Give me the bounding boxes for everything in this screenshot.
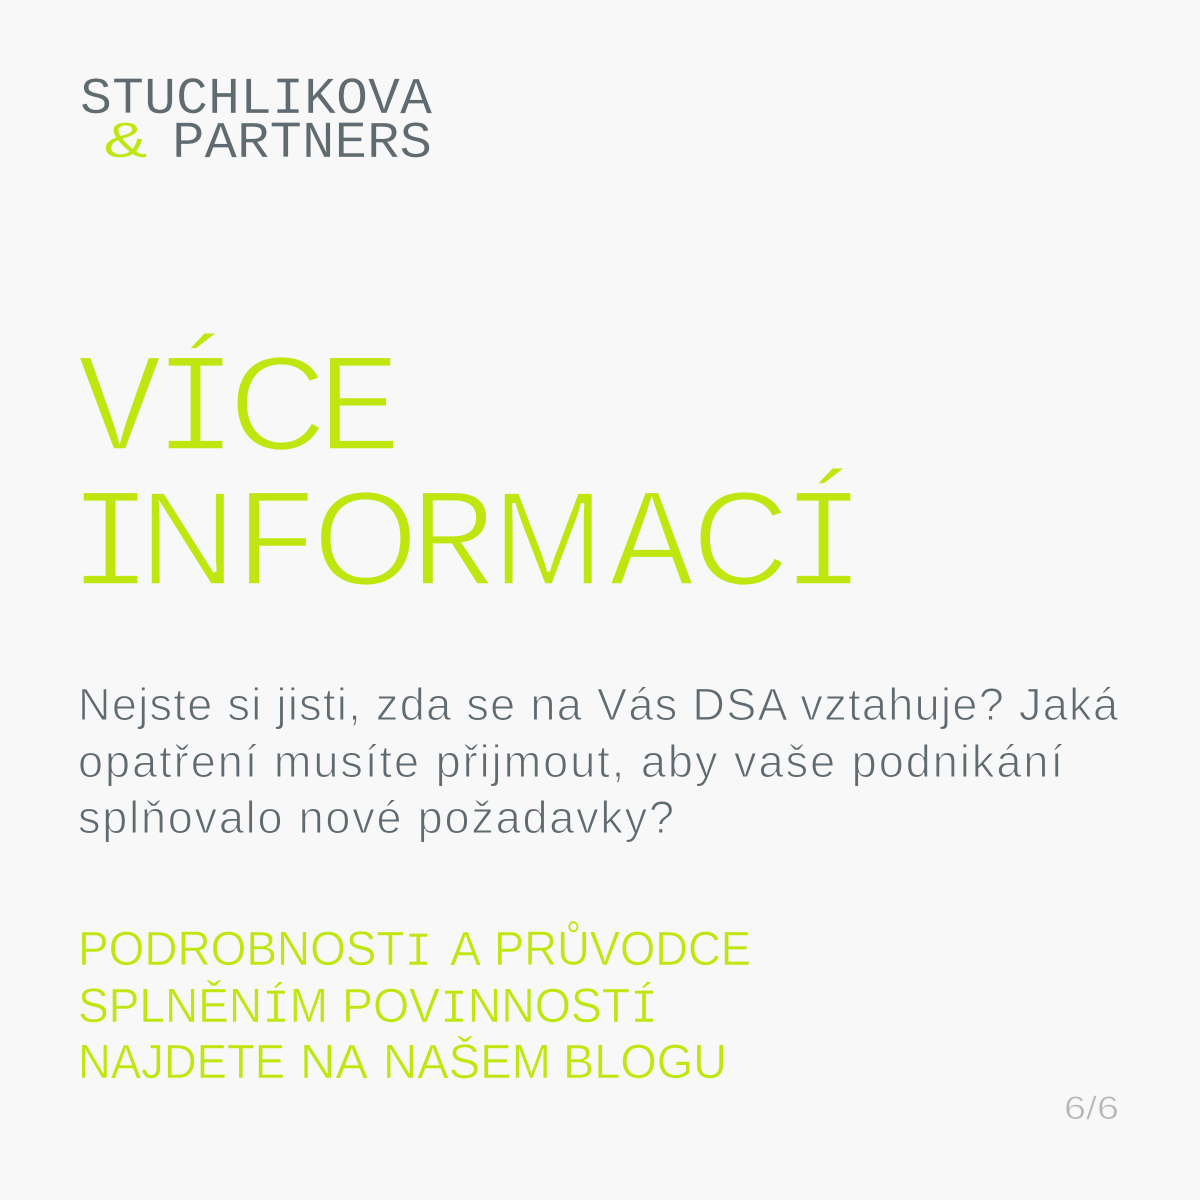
body text: questions (78, 679, 1119, 843)
call to action: blog link text: POVINNOSTÍ (342, 980, 658, 1037)
title: Více informací: A (609, 467, 695, 628)
title: Více informací: F (234, 467, 319, 628)
body text: questions: opatření musíte přijmout, aby vaše podnikání (78, 736, 1063, 787)
call to action: blog link text: A (450, 923, 481, 976)
logo: Stuchlikova & Partners (80, 70, 433, 173)
logo: Stuchlikova & Partners: STUCHLIKOVA (80, 70, 433, 129)
logo: Stuchlikova & Partners: PARTNERS (172, 114, 432, 173)
body text: questions: Nejste si jisti, zda se na Vás DSA vztahuje? Jaká (78, 679, 1119, 730)
call to action: blog link text: NA (300, 1036, 368, 1089)
call to action: blog link text: BLOGU (563, 1036, 727, 1089)
call to action: blog link text: NAJDETE (78, 1036, 285, 1089)
call to action: blog link text: PODROBNOSTI (78, 923, 432, 980)
call to action: blog link text (78, 921, 751, 1089)
title: Více informací: E (317, 332, 402, 493)
body text: questions: splňovalo nové požadavky? (78, 792, 674, 843)
title: Více informací: Í (781, 466, 866, 628)
title: Více informací: C (229, 328, 326, 479)
call to action: blog link text: NAŠEM (383, 1035, 551, 1089)
title: Více informací: M (492, 463, 604, 614)
title: Více informací: C (692, 463, 790, 614)
page number: 6/6 (1064, 1090, 1119, 1126)
title: Více informací: V (77, 332, 162, 493)
logo: Stuchlikova & Partners: & (104, 114, 148, 173)
title: Více informací: I (68, 467, 153, 628)
title: Více informací: Í (153, 331, 238, 493)
title: Více informací: O (313, 463, 418, 614)
call to action: blog link text: SPLNĚNÍM (78, 980, 328, 1037)
call to action: blog link text: PRŮVODCE (494, 921, 751, 976)
title: Více informací: N (139, 463, 236, 614)
title: Více informací (68, 328, 866, 628)
title: Více informací: R (410, 467, 495, 628)
